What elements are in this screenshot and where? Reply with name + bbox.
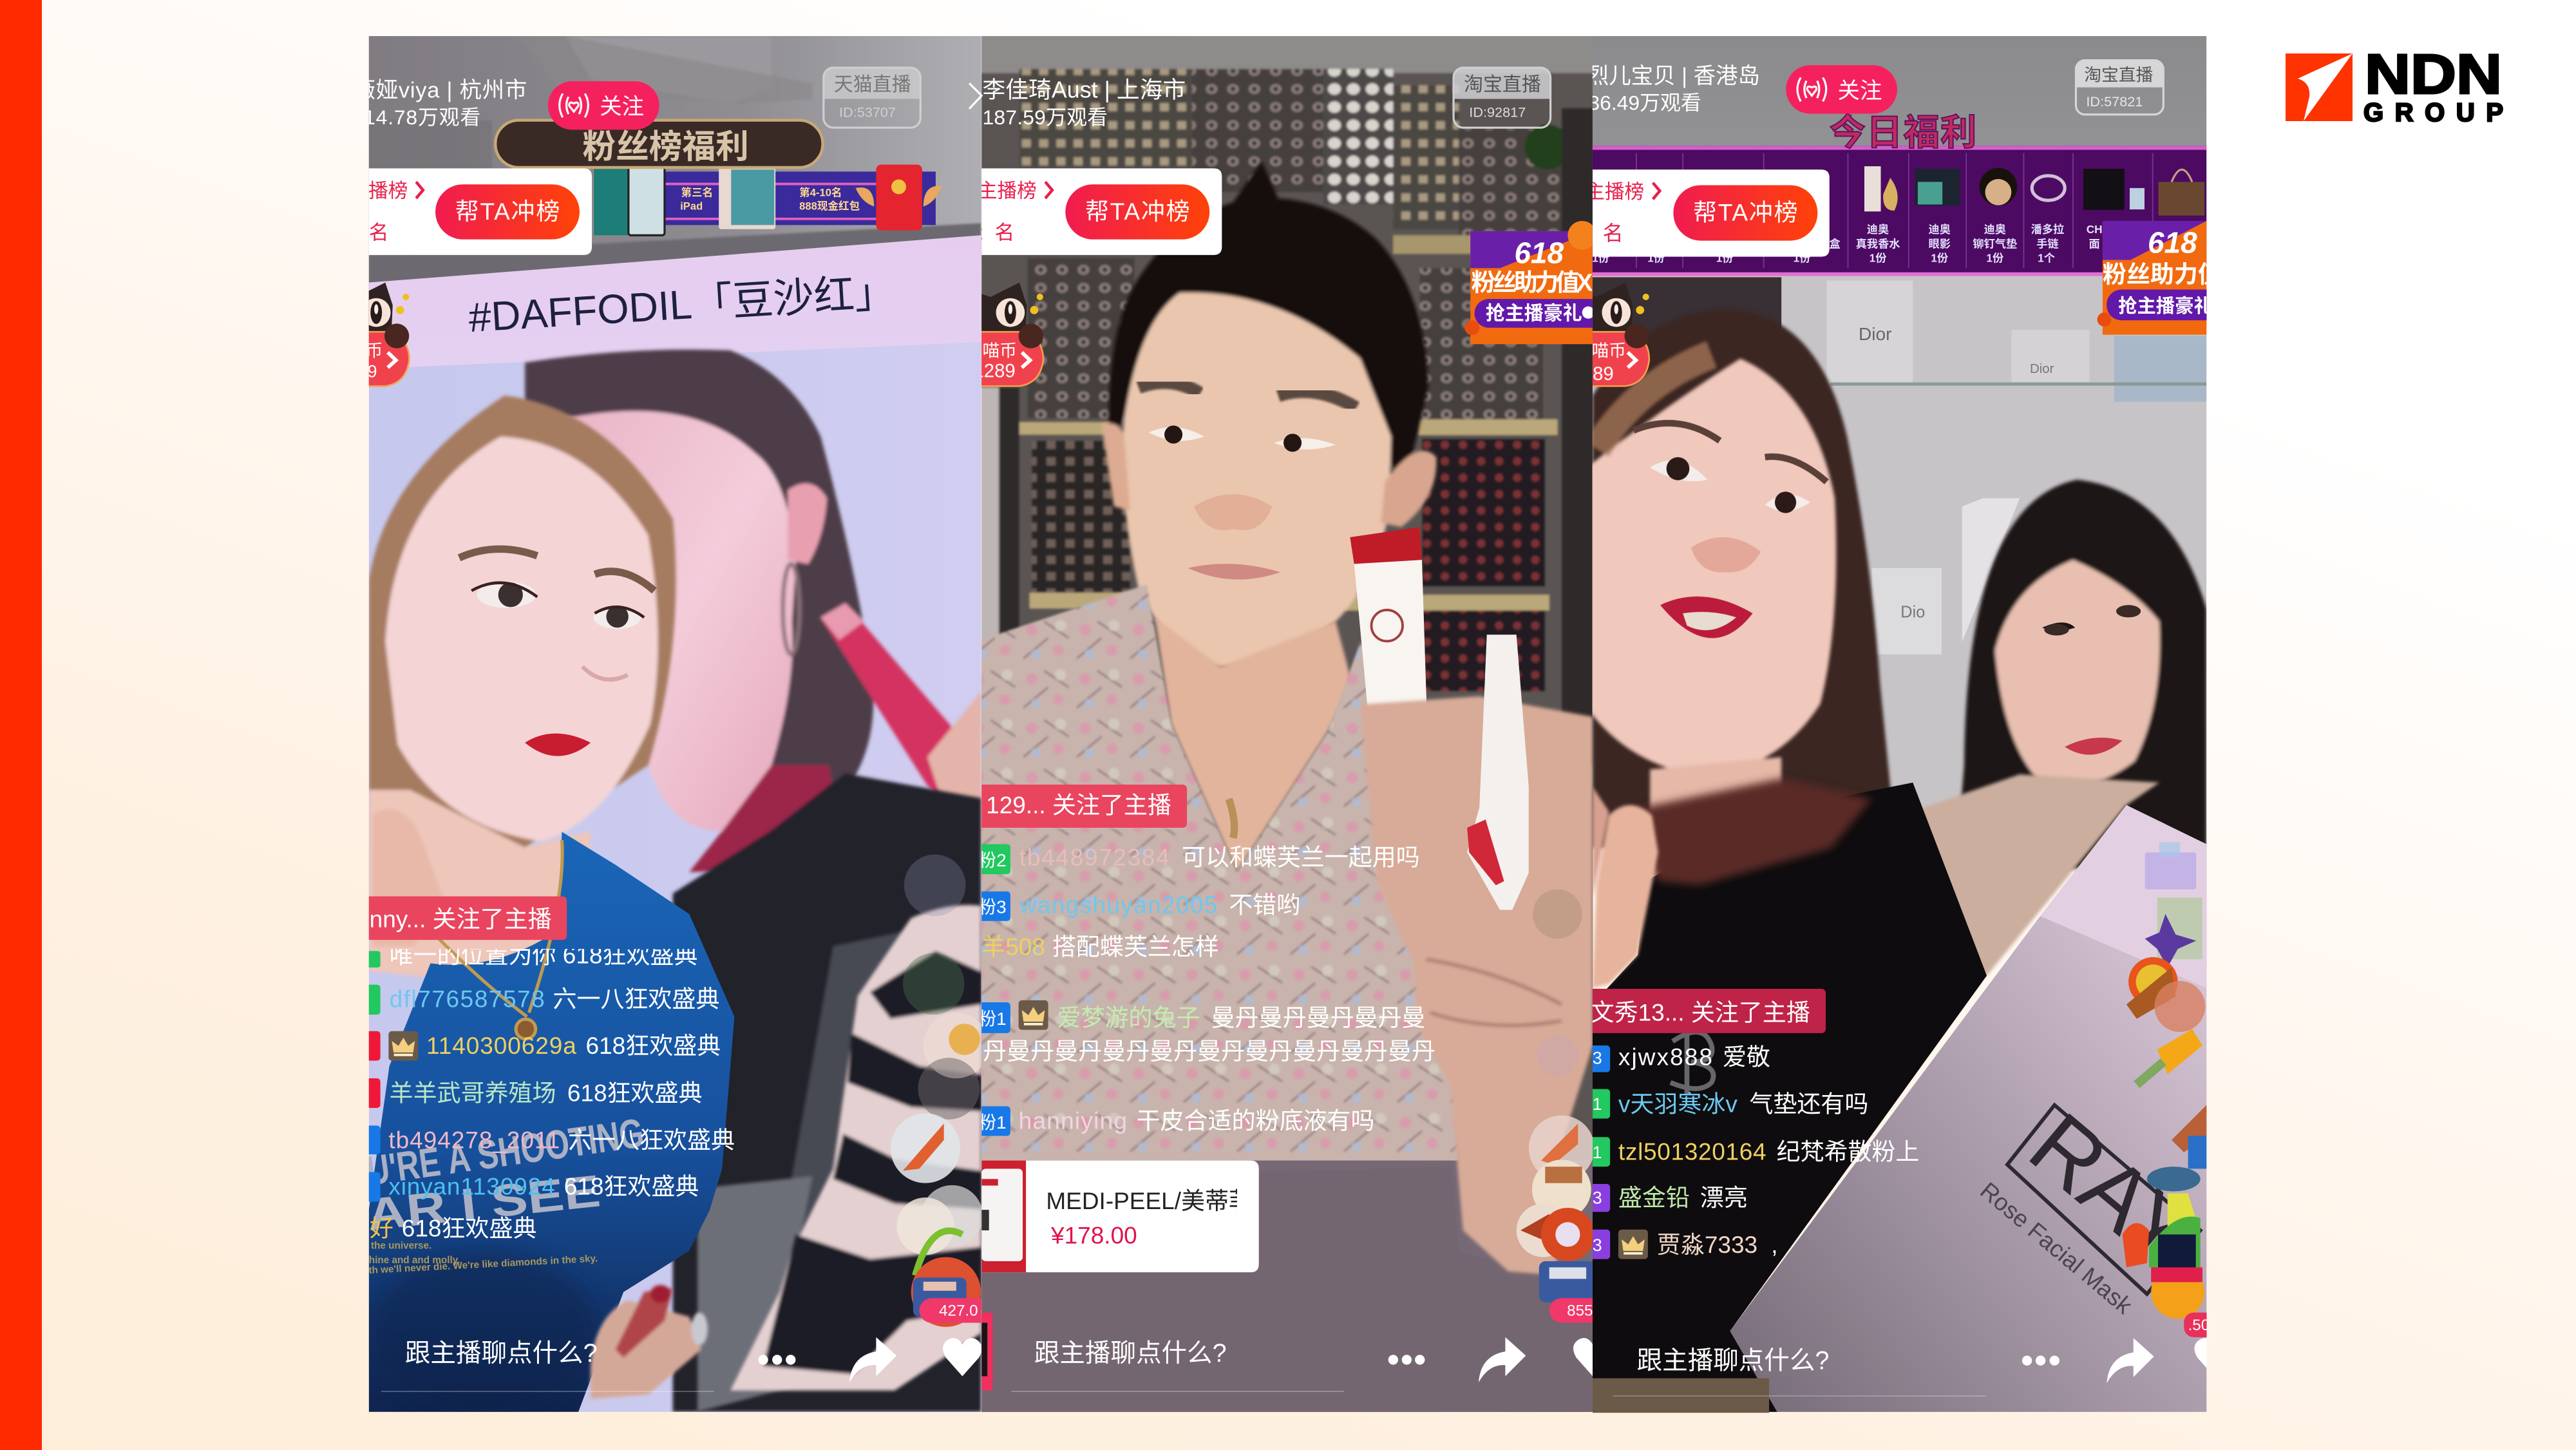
hand holding lipstick [591,1285,708,1399]
red side bar [0,0,42,1450]
ranking card: 2 [972,222,983,244]
box brand mark: Rose Facial Mask [1975,1177,2137,1319]
level badges: 3 [1593,1188,1602,1208]
follow button [1786,65,1897,113]
follow notice: 文秀13... 关注了主播 [1591,1000,1810,1026]
gift counter: 427.0 [939,1302,978,1320]
welfare product band: 1个 [2038,252,2055,265]
comment prompt: 跟主播聊点什么? [1034,1339,1227,1368]
chat rows: 618狂欢盛典 [402,1216,536,1242]
welfare product band: 1份 [1592,252,1609,265]
prize strip: iPad [680,200,703,213]
chat messages [1584,842,2233,1397]
welfare product band: 1份 [1870,252,1886,265]
follow button [548,81,659,129]
level badges: 3 [1593,1235,1602,1255]
chat rows: xinyan1130924 [388,1174,555,1200]
more dots [2022,1356,2060,1366]
crown badge [1618,1230,1648,1259]
mask box [1730,805,2206,1412]
share arrow [1479,1337,1526,1382]
header: host name and viewers: 187.59万观看 [983,106,1108,129]
chat rows: 唯一的位置为你 618狂欢盛典 [390,942,697,968]
chat rows: 羊羊武哥养殖场 [390,1080,556,1107]
chat rows: 不错哟 [1229,892,1300,919]
ranking card: 名 [369,222,388,244]
comment prompt: 跟主播聊点什么? [405,1339,598,1368]
welfare product band: 盒 [1829,237,1841,250]
welfare product band: 迪奥 [1867,223,1889,236]
chat rows: dfl776587578 [390,986,545,1013]
chat rows: 干皮合适的粉底液有吗 [1137,1107,1375,1134]
prize strip: 第三名 [681,186,713,199]
table [981,1161,1593,1412]
platform badge: 淘宝直播 [1464,74,1541,95]
chat rows [1618,1044,1919,1258]
mascot coin badge: 喵币 [1591,341,1626,360]
header: host name and viewers [1587,64,1760,115]
follow notice: nny... 关注了主播 [370,906,552,932]
floral shirt [974,584,1459,1176]
ranking card: 帮TA冲榜 [1085,198,1190,225]
chat rows: wangshuyan2005 [1019,892,1217,919]
chat rows: 搭配蝶芙兰怎样 [1052,934,1219,960]
heart [2194,1338,2233,1376]
chat rows: 丹曼丹曼丹曼丹曼丹曼丹曼丹曼丹曼丹曼丹 [983,1038,1435,1065]
welfare product band: 面 [2089,237,2100,250]
welfare product band: 1份 [1931,252,1948,265]
ranking card: 帮TA冲榜 [455,198,560,225]
chat rows: v天羽寒冰v [1618,1091,1738,1117]
header: host name and viewers [983,77,1186,129]
welfare product band: 迪奥 [1984,223,2006,236]
shirt print text: the universe. [371,1241,431,1252]
raised hand [1593,787,1658,988]
hand and arm [1360,696,1593,1275]
level badges [974,844,1010,1136]
background: wall and shelves: Dior [2030,362,2054,376]
mascot coin badge: 1289 [973,360,1016,381]
gift counter [919,1298,1010,1323]
gift counter [2184,1313,2233,1337]
shirt print text: U'RE A SHOOTING [364,1109,647,1194]
welfare product band: 铆钉气垫 [1973,237,2017,250]
chat rows: 贾淼7333 [1657,1232,1757,1258]
poster black top [673,774,981,1412]
background: wall and shelves: Dior [1859,324,1891,344]
ranking card: 名 [995,222,1014,244]
crown badge [388,1031,418,1061]
mascot coin badge [966,283,1043,386]
welfare product band: 真我香水 [1856,237,1900,250]
chat rows: 1140300629a [426,1033,576,1059]
chat rows: 盛金铅 [1618,1185,1690,1211]
ranking card: 帮TA冲榜 [1693,199,1798,225]
chat rows: tb448972384 [1019,844,1170,871]
chat rows: hanniying [1019,1107,1127,1134]
panel: viya live stream [368,36,981,1412]
NDN Group logo [2286,43,2503,127]
product card: ¥178.00 [1050,1222,1137,1248]
chat rows: 好 [370,1216,393,1242]
mascot coin badge [1572,283,1649,386]
logo mark [2286,53,2353,121]
ranking card: 主播榜 [978,180,1037,202]
heart edge from previous stream [942,1313,992,1391]
level badges: 粉1 [978,1112,1007,1132]
logo wordmark: NDN [2365,43,2502,106]
follow notice [966,785,1187,828]
header: host name and viewers: 36.49万观看 [1588,91,1701,115]
chat rows: tb494278_2011 [388,1127,560,1153]
heart [1573,1338,1613,1376]
input underline [381,1391,714,1392]
chat rows: 618狂欢盛典 [564,1174,699,1200]
background: wall and shelves: Dio [1900,603,1925,621]
ranking card [349,168,592,255]
level badges: 1 [1593,1143,1602,1162]
right host [1954,480,2206,971]
level badges: 粉1 [978,1009,1007,1029]
prize strip: 888现金红包 [799,200,860,213]
chat rows: 618狂欢盛典 [567,1080,702,1107]
header: host name and viewers: 14.78万观看 [364,106,480,129]
level badges: 1 [1593,1094,1602,1114]
level badges: 粉2 [978,850,1007,870]
host neck [1155,617,1352,872]
gift counter: .50 [2188,1317,2210,1334]
platform badge: 天猫直播 [834,74,911,95]
poster heading: #DAFFODIL「豆沙红」 [467,269,896,341]
follow button: 关注 [1838,79,1882,103]
floating gift icons [2123,842,2206,1319]
band heading: 今日福利 [1830,112,1976,153]
background: wall and shelves [1593,36,2206,848]
poster model [525,350,981,872]
chat rows: 爱敬 [1723,1044,1770,1071]
chair and seat [697,931,903,1412]
logo wordmark: GROUP [2363,99,2503,127]
platform badge [1454,68,1551,128]
ranking card [966,168,1222,255]
platform badge: ID:53707 [839,104,896,120]
platform badge: 淘宝直播 [2084,65,2153,84]
gift counter [1549,1298,1631,1323]
ranking card: 名 [1603,222,1624,245]
platform badge: ID:92817 [1469,104,1526,120]
618 promo banner: 618 [1514,236,1564,270]
follow notice: 129... 关注了主播 [986,792,1171,819]
background: ceiling [361,26,993,330]
chat rows: 羊508 [981,934,1045,960]
squeezed tube [1467,634,1529,910]
header: host name and viewers: 李佳琦Aust | 上海市 [983,77,1186,103]
share arrow [849,1337,896,1382]
more dots [758,1355,795,1365]
mascot coin badge: 289 [1582,363,1614,385]
main host [369,396,676,979]
host hair and face [1101,161,1436,667]
crown badge [1019,1000,1048,1030]
platform badge [824,68,920,128]
heart [943,1338,982,1376]
platform badge [2076,61,2163,115]
level badges: 粉3 [978,897,1007,917]
floating gift icons [1517,890,1596,1302]
level badges: 3 [1593,1049,1602,1068]
box brand mark: RAY [2011,1094,2213,1286]
previous stream chevron [969,83,981,109]
dark banner [495,120,823,167]
ranking card [1584,169,1830,256]
618 promo banner [2098,221,2230,335]
chat rows: 六一八狂欢盛典 [568,1127,735,1153]
host facial features [1139,383,1356,580]
poster background [369,235,981,1412]
floating gift icons [891,854,989,1327]
618 promo banner: 618 [2148,226,2197,260]
header: host name and viewers [354,79,527,129]
header: host name and viewers: 烈儿宝贝 | 香港岛 [1587,64,1760,88]
chat rows: 曼丹曼丹曼丹曼丹曼 [1211,1004,1426,1031]
welfare product band: CH [2087,223,2103,236]
618 promo banner: 粉丝助力值X [1471,269,1593,296]
left host hair [1593,309,1897,848]
live stream screenshots and logo [368,36,2503,1413]
chat rows: 纪梵希散粉上 [1776,1138,1919,1165]
shirt print text: th we'll never die. We're like diamonds in the sky. [368,1253,598,1276]
618 promo banner: 抢主播豪礼 [1486,303,1582,325]
product tube [1350,527,1429,806]
host blue shirt [369,832,734,1415]
welfare product band: 手链 [2036,237,2059,250]
shirt print text [364,1109,647,1276]
header: host name and viewers: 薇娅viya | 杭州市 [354,79,527,103]
left host facial features [1634,423,1826,638]
ranking card: 主播榜 [1585,181,1644,203]
welfare product band: 1份 [1716,252,1734,265]
chat rows: 漂亮 [1700,1185,1748,1211]
chat messages [942,785,1631,1392]
input underline [1613,1395,1986,1397]
follow notice [1584,989,1826,1033]
left host face [1584,354,1836,881]
bottom brown strip [1593,1378,1769,1413]
share arrow [2107,1338,2154,1383]
prize strip: 第4-10名 [799,186,842,199]
welfare product band: 1份 [1794,252,1810,265]
mascot coin badge: 喵币 [348,341,383,360]
shirt print text: AR I SEE [365,1165,603,1240]
logo wordmark [2363,43,2503,127]
chat rows: , [1771,1232,1777,1258]
input underline [1011,1391,1344,1392]
panel: li jiaqi live stream [942,30,1631,1418]
chat rows: 气垫还有吗 [1749,1091,1868,1117]
chat rows [981,844,1435,1134]
platform badge: ID:57821 [2086,93,2143,110]
shirt print text: hine and and molly. [369,1255,460,1266]
welfare product band: 眼影 [1928,237,1951,250]
right host facial features [2042,605,2141,755]
right host blouse [1913,774,2159,976]
more dots [1388,1355,1425,1365]
background: cosmetics wall [974,30,1598,1418]
level badges [1584,1045,1610,1259]
chat rows: 爱梦游的兔子 [1057,1004,1200,1031]
black top [1593,778,1987,1412]
618 promo banner: 粉丝助力值 [2103,262,2222,288]
welfare product band: 1份 [1986,252,2003,265]
panel: lie'er baobei live stream [1572,36,2233,1413]
striped shirt person [730,905,981,1391]
chat rows: 可以和蝶芙兰一起用吗 [1182,844,1420,871]
chat rows: xjwx888 [1618,1044,1712,1071]
welfare product band: 迪奥 [1928,223,1951,236]
chat rows: 618狂欢盛典 [586,1033,721,1059]
prize strip [594,158,942,235]
dark banner: 粉丝榜福利 [582,128,749,165]
618 promo banner: 抢主播豪礼 [2118,296,2213,317]
chat rows [370,942,735,1242]
chat rows: 六一八狂欢盛典 [553,986,719,1013]
host facial features [459,549,654,756]
chat messages [361,854,1010,1392]
gift counter: 855 [1567,1302,1593,1320]
618 promo banner [1464,221,1606,344]
product card [981,1161,1259,1272]
level badges [361,951,381,1201]
mascot coin badge: 喵币 [983,341,1017,360]
chat rows: tzl501320164 [1618,1138,1766,1165]
jacket monogram [1671,1029,1714,1095]
follow notice [361,896,567,940]
mascot coin badge [332,283,409,386]
ranking card: 主播榜 [349,180,408,202]
welfare product band: 1份 [1647,252,1665,265]
product card: MEDI-PEEL/美蒂菲 [1046,1188,1253,1214]
mascot coin badge: 289 [348,361,377,381]
welfare product band: 潘多拉 [2031,223,2064,236]
necklace [1229,799,1235,838]
follow button: 关注 [600,95,644,119]
comment prompt: 跟主播聊点什么? [1637,1347,1829,1375]
welfare product band [1592,146,2206,276]
gold necklace [439,840,562,1039]
